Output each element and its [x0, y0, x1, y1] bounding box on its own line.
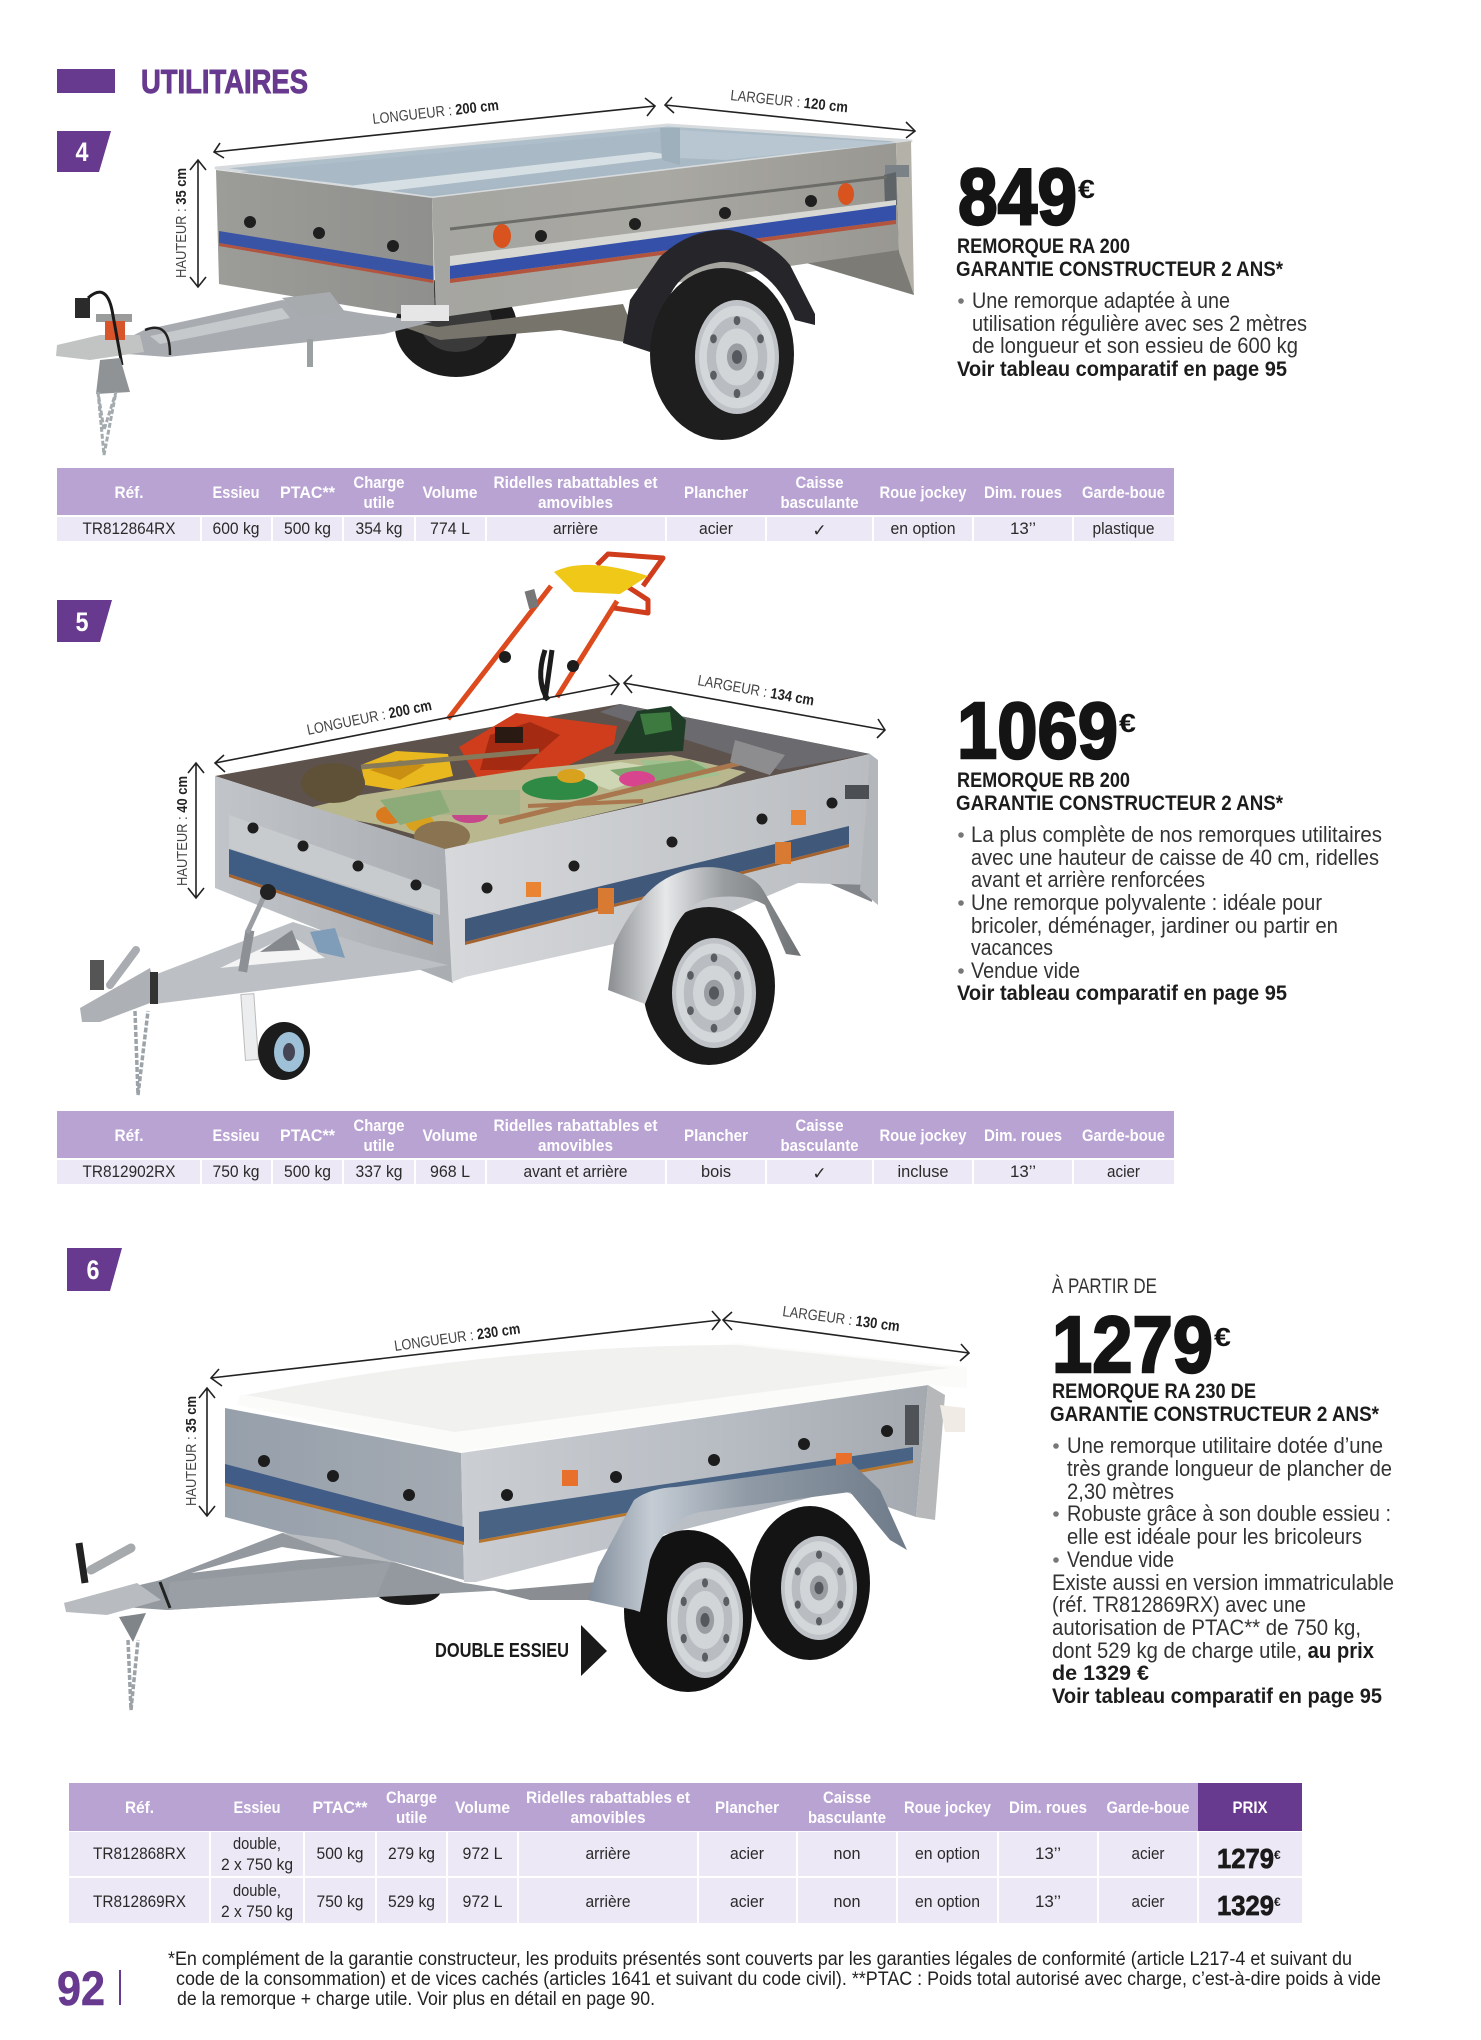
spec table: RA 230 DE with prices: non	[834, 1844, 860, 1863]
spec table: RA 200: Essieu	[212, 484, 260, 502]
spec table: RA 200	[57, 468, 1174, 541]
stripes	[225, 1464, 464, 1542]
dimension: largeur 120 cm: LARGEUR : 120 cm	[730, 87, 849, 116]
price block: RA 230 DE: À PARTIR DE	[1052, 1275, 1157, 1298]
spec table: RA 230 DE with prices: Volume	[455, 1799, 510, 1817]
spec table: RB 200: bois	[701, 1162, 731, 1181]
dimension: longueur 200 cm: LONGUEUR : 200 cm	[372, 97, 500, 128]
spec table: RA 230 DE with prices: 13’’	[1035, 1844, 1061, 1863]
dimension: longueur 230 cm	[211, 1311, 720, 1386]
spec table: RA 200: Caisse	[796, 474, 844, 492]
spec table: RA 230 DE with prices: 1279	[1217, 1843, 1274, 1874]
dimension: hauteur 35 cm	[173, 160, 206, 287]
spec table: RB 200: TR812902RX	[82, 1162, 176, 1181]
spec table: RB 200	[57, 1111, 1174, 1184]
spec table: RA 200: 354 kg	[356, 519, 402, 538]
spec table: RA 230 DE with prices: 1329	[1217, 1890, 1274, 1921]
reflectors	[562, 1470, 578, 1486]
spec table: RA 230 DE with prices: Garde-boue	[1106, 1799, 1190, 1817]
spec table: RA 200: Plancher	[684, 484, 749, 502]
dimension: hauteur 40 cm	[174, 763, 204, 898]
dimension: largeur 134 cm: LARGEUR : 134 cm	[696, 672, 815, 709]
spec table: RB 200: amovibles	[538, 1137, 613, 1155]
spec table: RA 230 DE with prices: 529 kg	[388, 1892, 435, 1911]
spec table: RB 200: avant et arrière	[524, 1162, 628, 1181]
spec table: RA 230 DE with prices: 972 L	[462, 1844, 502, 1863]
spec table: RA 230 DE with prices: PRIX	[1232, 1799, 1268, 1817]
spec table: RA 230 DE with prices: en option	[915, 1892, 980, 1911]
badge: number 4: 4	[76, 137, 88, 167]
spec table: RA 230 DE with prices: 13’’	[1035, 1892, 1061, 1911]
spec table: RB 200: Garde-boue	[1082, 1127, 1165, 1145]
price block: RB 200: €	[1119, 708, 1136, 738]
spec table: RA 230 DE with prices: €	[1274, 1895, 1281, 1909]
bed interior	[215, 704, 870, 849]
spec table: RA 200: ✓	[812, 521, 827, 541]
price block: RA 230 DE: très grande longueur de plancher de	[1067, 1456, 1392, 1481]
coupler	[64, 1583, 161, 1615]
spec table: RA 200: Roue jockey	[880, 484, 967, 502]
front panel	[215, 776, 453, 983]
dimension: largeur 134 cm	[624, 672, 885, 738]
dimension: longueur 230 cm: LONGUEUR : 230 cm	[393, 1320, 521, 1355]
dimension: hauteur 35 cm	[183, 1388, 215, 1516]
spec table: RB 200: Ridelles rabattables et	[494, 1117, 658, 1135]
safety chain	[98, 392, 116, 455]
spec table: RA 230 DE with prices: utile	[396, 1809, 427, 1827]
drawbar	[100, 300, 432, 357]
product image: trailer RB 200 with mower	[80, 554, 878, 1095]
badge: number 6	[67, 1248, 122, 1291]
spec table: RB 200: PTAC**	[280, 1127, 336, 1145]
price block: RA 230 DE: €	[1214, 1322, 1231, 1352]
stripes	[219, 231, 433, 280]
safety chain	[135, 1011, 148, 1095]
footnote	[168, 1949, 1381, 2010]
price block: RA 200: utilisation régulière avec ses 2 mètres	[972, 311, 1307, 336]
spec table: RA 200: plastique	[1092, 519, 1154, 538]
spec table: RA 230 DE with prices: 279 kg	[388, 1844, 435, 1863]
spec table: RA 230 DE with prices: double,	[233, 1834, 281, 1853]
section header: utilitaires: UTILITAIRES	[141, 63, 308, 100]
spec table: RA 230 DE with prices: Caisse	[823, 1789, 871, 1807]
spec table: RA 230 DE with prices: basculante	[808, 1809, 886, 1827]
footnote: de la remorque + charge utile. Voir plus en détail en page 90.	[177, 1989, 655, 2010]
spec table: RB 200: basculante	[780, 1137, 858, 1155]
chassis underside	[464, 1580, 620, 1600]
spec table: RA 200: arrière	[553, 519, 598, 538]
spec table: RA 230 DE with prices	[69, 1783, 1302, 1923]
spec table: RB 200: 13’’	[1010, 1162, 1036, 1181]
price block: RA 230 DE: de 1329 €	[1052, 1662, 1149, 1685]
price block: RA 200: 849	[958, 152, 1077, 241]
chassis underside	[372, 304, 640, 345]
dimension: largeur 130 cm	[723, 1303, 969, 1361]
price block: RB 200: Une remorque polyvalente : idéale pour	[971, 890, 1322, 915]
price block: RB 200	[956, 686, 1382, 1005]
spec table: RB 200: acier	[1107, 1162, 1140, 1181]
reflectors	[526, 882, 541, 897]
main wheel	[650, 268, 794, 440]
spec table: RB 200: Dim. roues	[984, 1127, 1062, 1145]
spec table: RA 230 DE with prices: €	[1274, 1848, 1281, 1862]
spec table: RB 200: Réf.	[114, 1127, 144, 1145]
spec table: RB 200: 750 kg	[212, 1162, 260, 1181]
green trimmer	[614, 706, 686, 754]
price block: RB 200: La plus complète de nos remorques utilitaires	[971, 822, 1382, 847]
spec table: RA 230 DE with prices: TR812869RX	[93, 1892, 186, 1911]
side panel	[461, 1385, 928, 1582]
price block: RA 200: Une remorque adaptée à une	[972, 288, 1230, 313]
spec table: RA 200: Réf.	[114, 484, 144, 502]
dimension: hauteur 35 cm: HAUTEUR : 35 cm	[183, 1396, 200, 1506]
price block: RA 230 DE: (réf. TR812869RX) avec une	[1052, 1592, 1306, 1617]
dimension: longueur 200 cm	[214, 97, 655, 158]
price block: RA 200	[956, 152, 1307, 381]
spec table: RB 200: Caisse	[796, 1117, 844, 1135]
spec table: RA 230 DE with prices: arrière	[586, 1844, 630, 1863]
spec table: RA 230 DE with prices: 2 x 750 kg	[221, 1902, 293, 1921]
spec table: RA 200: 774 L	[430, 519, 470, 538]
badge: number 4	[57, 131, 111, 172]
spec table: RB 200: Charge	[354, 1117, 404, 1135]
price block: RA 230 DE	[1050, 1275, 1394, 1708]
bolts and reflectors	[244, 195, 817, 252]
price block: RA 200: REMORQUE RA 200	[957, 235, 1130, 258]
spec table: RB 200: 337 kg	[356, 1162, 402, 1181]
badge: number 5	[57, 600, 112, 642]
price block: RA 230 DE: elle est idéale pour les bricoleurs	[1067, 1524, 1362, 1549]
front panel	[225, 1408, 464, 1580]
footnote: code de la consommation) et de vices cachés (articles 1641 et suivant du code civil). **PTAC : Poids total autorisé avec charge, c’est-à-dire poids à vide	[176, 1969, 1381, 1990]
spec table: RA 230 DE with prices: PTAC**	[312, 1799, 368, 1817]
bundle and rakes	[301, 763, 365, 803]
spec table: RA 230 DE with prices: TR812868RX	[93, 1844, 186, 1863]
spec table: RB 200: Plancher	[684, 1127, 749, 1145]
price block: RA 200: Voir tableau comparatif en page 95	[957, 358, 1287, 381]
spec table: RA 200: Garde-boue	[1082, 484, 1165, 502]
mudguard	[623, 230, 815, 352]
stripes	[229, 849, 433, 942]
price block: RA 230 DE: GARANTIE CONSTRUCTEUR 2 ANS*	[1050, 1403, 1380, 1426]
price block: RA 200: GARANTIE CONSTRUCTEUR 2 ANS*	[956, 258, 1284, 281]
drawbar	[64, 1533, 507, 1610]
footnote: *En complément de la garantie constructeur, les produits présentés sont couverts par les garanties légales de conformité (article L217-4 et suivant du	[168, 1949, 1352, 1970]
spec table: RA 230 DE with prices: non	[834, 1892, 860, 1911]
side panel	[432, 143, 899, 320]
mower handle	[448, 586, 617, 719]
drawbar	[149, 922, 448, 1004]
mower body	[459, 713, 617, 786]
front panel	[216, 170, 435, 320]
spec table: RA 230 DE with prices: Charge	[386, 1789, 437, 1807]
spec table: RB 200: ✓	[812, 1164, 827, 1184]
spec table: RA 230 DE with prices: double,	[233, 1881, 281, 1900]
price block: RA 230 DE: Une remorque utilitaire dotée d’une	[1067, 1433, 1383, 1458]
spec table: RA 200: Volume	[422, 484, 478, 502]
spec table: RA 230 DE with prices: 972 L	[462, 1892, 502, 1911]
price block: RB 200: avec une hauteur de caisse de 40 cm, ridelles	[971, 845, 1379, 870]
spec table: RB 200: utile	[364, 1137, 394, 1155]
price block: RA 230 DE: Robuste grâce à son double essieu :	[1067, 1501, 1391, 1526]
coupler	[56, 335, 144, 360]
page number: 92	[57, 1963, 105, 2016]
spec table: RA 200: 600 kg	[212, 519, 260, 538]
rear wheel	[750, 1506, 870, 1660]
spec table: RA 230 DE with prices: amovibles	[570, 1809, 646, 1827]
spec table: RA 230 DE with prices: acier	[730, 1844, 764, 1863]
spec table: RA 200: 500 kg	[284, 519, 331, 538]
price block: RA 230 DE: autorisation de PTAC** de 750 kg,	[1052, 1615, 1361, 1640]
side panel	[445, 754, 872, 982]
spec table: RA 200: utile	[364, 494, 394, 512]
spec table: RB 200: Essieu	[212, 1127, 260, 1145]
spec table: RA 200: Ridelles rabattables et	[494, 474, 658, 492]
safety chain	[128, 1640, 138, 1710]
product image: trailer RA 200	[56, 125, 914, 455]
garden bags	[300, 755, 746, 847]
price block: RB 200: bricoler, déménager, jardiner ou partir en	[971, 913, 1338, 938]
front wheel	[624, 1530, 752, 1692]
spec table: RA 230 DE with prices: Roue jockey	[904, 1799, 992, 1817]
spec table: RB 200: Volume	[422, 1127, 478, 1145]
dimension: hauteur 35 cm: HAUTEUR : 35 cm	[173, 168, 190, 278]
spec table: RA 200: PTAC**	[280, 484, 336, 502]
price block: RA 200: de longueur et son essieu de 600 kg	[972, 333, 1298, 358]
price block: RB 200: 1069	[957, 686, 1118, 775]
section header: utilitaires	[57, 63, 308, 100]
far wheel	[395, 277, 517, 377]
spec table: RA 230 DE with prices: acier	[1132, 1892, 1165, 1911]
spec table: RA 230 DE with prices: Dim. roues	[1009, 1799, 1087, 1817]
spec table: RA 200: TR812864RX	[82, 519, 176, 538]
price block: RA 230 DE: Voir tableau comparatif en page 95	[1052, 1685, 1382, 1708]
rear bracket	[798, 800, 872, 902]
load bed interior	[216, 125, 911, 198]
bolts	[258, 1425, 893, 1501]
badge: number 6: 6	[86, 1255, 100, 1285]
spec table: RA 200: Dim. roues	[984, 484, 1062, 502]
price block: RA 230 DE: Existe aussi en version immatriculable	[1052, 1570, 1394, 1595]
bolts	[248, 798, 838, 894]
price block: RB 200: Vendue vide	[971, 958, 1080, 983]
coupler	[80, 968, 158, 1022]
price block: RB 200: vacances	[971, 935, 1053, 960]
spec table: RA 230 DE with prices: Réf.	[125, 1799, 154, 1817]
spec table: RB 200: 500 kg	[284, 1162, 331, 1181]
spec table: RA 230 DE with prices: arrière	[586, 1892, 630, 1911]
spec table: RA 200: amovibles	[538, 494, 613, 512]
main wheel	[643, 907, 775, 1065]
rear corner bracket	[803, 248, 914, 295]
dimension: longueur 200 cm: LONGUEUR : 200 cm	[305, 697, 433, 739]
price block: RA 230 DE: 1279	[1052, 1300, 1213, 1389]
price block: RA 230 DE: dont 529 kg de charge utile, au prix	[1052, 1638, 1375, 1663]
callout: double essieu: DOUBLE ESSIEU	[435, 1640, 569, 1662]
dimension: largeur 120 cm	[665, 87, 915, 138]
spec table: RA 200: basculante	[780, 494, 858, 512]
spec table: RA 230 DE with prices: Essieu	[234, 1799, 280, 1817]
dimension: hauteur 40 cm: HAUTEUR : 40 cm	[174, 776, 191, 886]
dimension: largeur 130 cm: LARGEUR : 130 cm	[781, 1303, 901, 1335]
price block: RB 200: avant et arrière renforcées	[971, 867, 1205, 892]
price block: RB 200: Voir tableau comparatif en page 95	[957, 982, 1287, 1005]
mudguard	[608, 867, 801, 1004]
spec table: RA 230 DE with prices: Ridelles rabattables et	[526, 1789, 690, 1807]
spec table: RA 230 DE with prices: 500 kg	[316, 1844, 364, 1863]
spec table: RA 230 DE with prices: 750 kg	[316, 1892, 364, 1911]
badge: number 5: 5	[76, 607, 88, 637]
price block: RA 230 DE: 2,30 mètres	[1067, 1479, 1174, 1504]
price block: RA 230 DE: Vendue vide	[1067, 1547, 1174, 1572]
spec table: RA 200: acier	[699, 519, 733, 538]
spec table: RA 230 DE with prices: acier	[1132, 1844, 1165, 1863]
yellow mower housing	[361, 751, 453, 790]
spec table: RA 200: Charge	[354, 474, 404, 492]
hidden far wheel	[375, 1575, 441, 1605]
spec table: RB 200: incluse	[898, 1162, 948, 1181]
callout: double essieu	[435, 1625, 607, 1676]
dimension: longueur 200 cm	[215, 675, 619, 772]
price block: RB 200: GARANTIE CONSTRUCTEUR 2 ANS*	[956, 792, 1284, 815]
spec table: RA 230 DE with prices: en option	[915, 1844, 980, 1863]
white cover	[237, 1343, 967, 1452]
mudguard	[588, 1463, 907, 1612]
spec table: RA 230 DE with prices: acier	[730, 1892, 764, 1911]
spec table: RA 230 DE with prices: 2 x 750 kg	[221, 1855, 293, 1874]
spec table: RB 200: Roue jockey	[880, 1127, 967, 1145]
jockey wheel	[241, 994, 258, 1060]
price block: RA 200: €	[1078, 174, 1095, 204]
spec table: RB 200: 968 L	[430, 1162, 470, 1181]
price block: RB 200: REMORQUE RB 200	[957, 769, 1130, 792]
price block: RA 230 DE: REMORQUE RA 230 DE	[1052, 1380, 1256, 1403]
spec table: RA 230 DE with prices: Plancher	[715, 1799, 780, 1817]
spec table: RA 200: 13’’	[1010, 519, 1036, 538]
product image: trailer RA 230 DE with cover	[64, 1343, 967, 1710]
spec table: RA 200: en option	[890, 519, 956, 538]
